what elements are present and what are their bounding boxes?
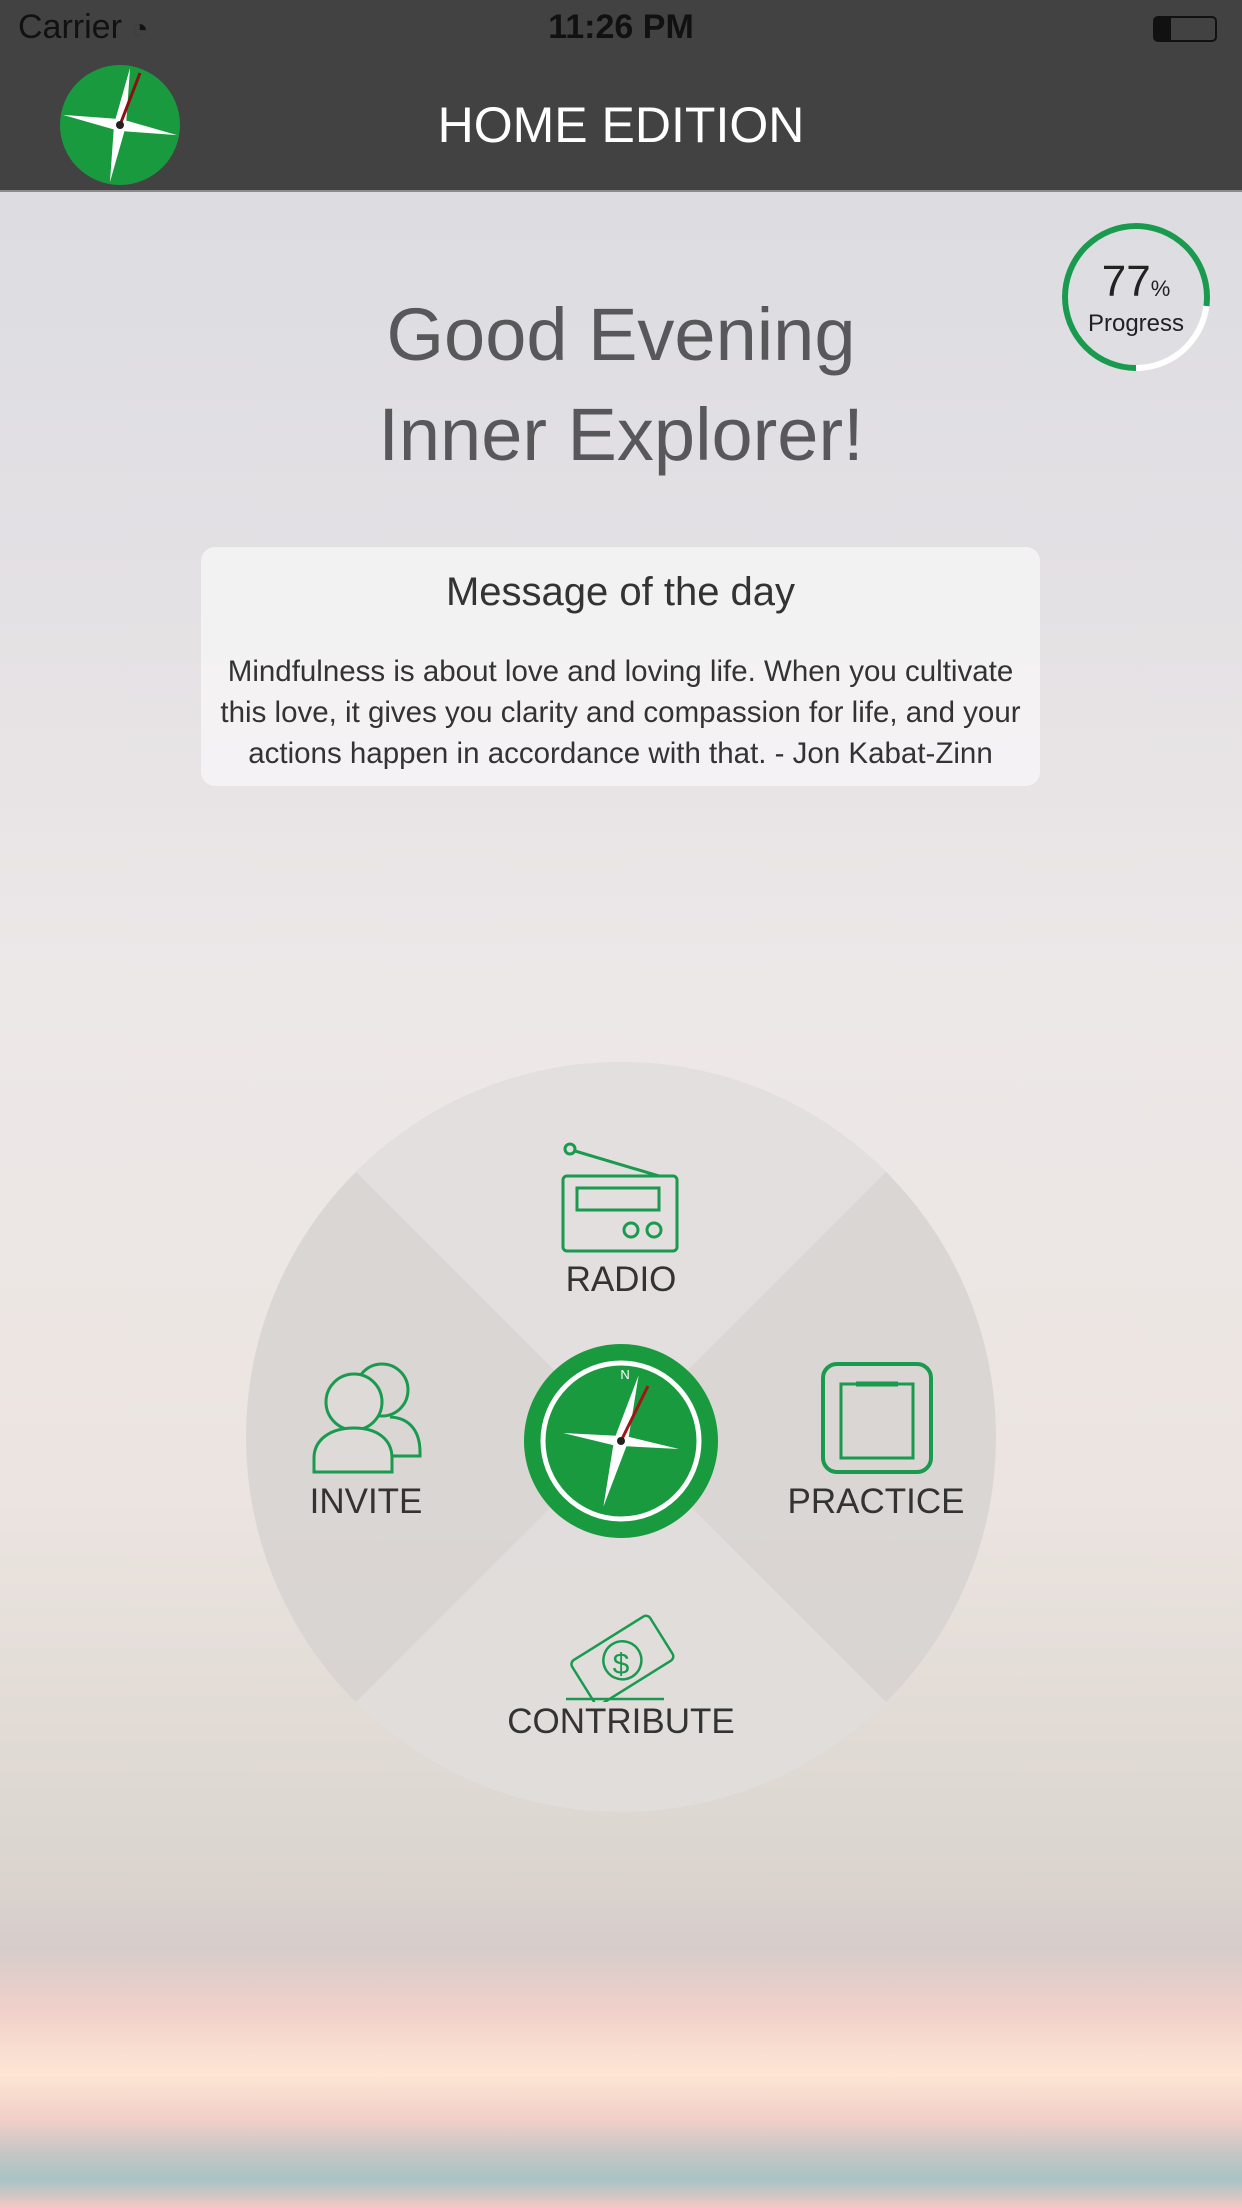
menu wheel	[246, 1062, 996, 1812]
message heading: Message of the day	[446, 570, 795, 614]
panel: message of the day	[201, 547, 1040, 786]
icon: center compass	[524, 1344, 718, 1538]
icon: practice	[821, 1362, 933, 1474]
icon: center compass: N	[620, 1367, 630, 1382]
icon: contribute: $	[613, 1648, 630, 1681]
message body: this love, it gives you clarity and compassion for life, and your	[220, 696, 1021, 729]
progress label: Progress	[1088, 310, 1184, 337]
icon: contribute	[566, 1614, 674, 1702]
status: battery	[1153, 16, 1217, 42]
greeting heading: Good Evening	[386, 293, 856, 376]
icon: radio	[562, 1142, 678, 1252]
message body: actions happen in accordance with that. - Jon Kabat-Zinn	[248, 737, 993, 770]
header title: HOME EDITION	[438, 97, 804, 153]
message body: Mindfulness is about love and loving life. When you cultivate	[228, 655, 1013, 688]
progress value: 77%	[1102, 257, 1170, 306]
logo: compass	[60, 65, 180, 185]
label: practice: PRACTICE	[788, 1482, 964, 1521]
message body	[220, 655, 1021, 770]
label: invite: INVITE	[310, 1482, 422, 1521]
header bar	[0, 0, 1242, 192]
progress ring	[1062, 223, 1210, 371]
label: contribute: CONTRIBUTE	[507, 1702, 735, 1741]
status: carrier: Carrier ◔	[18, 8, 148, 46]
greeting heading: Inner Explorer!	[378, 393, 864, 476]
status: time: 11:26 PM	[548, 8, 694, 46]
icon: invite	[312, 1362, 422, 1474]
label: radio: RADIO	[566, 1260, 676, 1299]
greeting heading	[378, 293, 864, 476]
